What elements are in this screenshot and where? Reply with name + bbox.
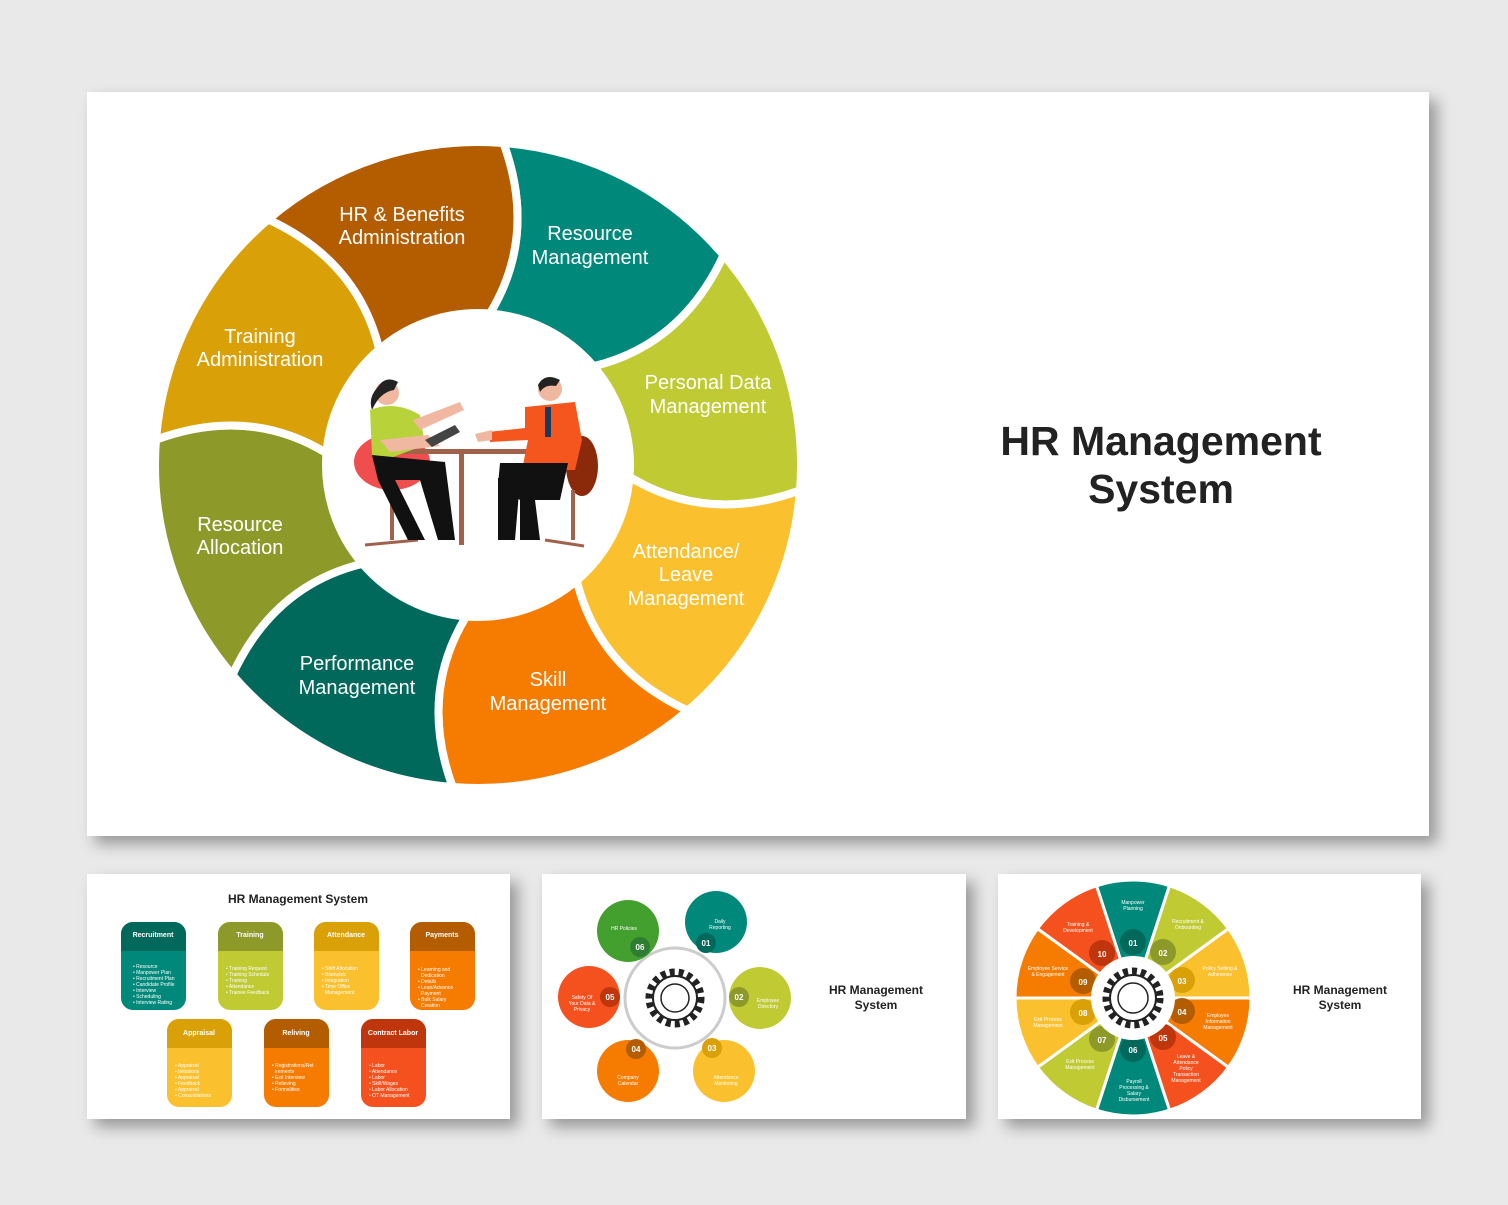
cards: • Recruitment Plan [133,976,175,982]
thumbnail title [829,983,923,1012]
segment labels: Policy [1179,1066,1193,1072]
segment labels: Adherence [1208,972,1232,978]
segment: performance management: Performance [300,653,414,675]
cards: • Interview Rating [133,1000,172,1006]
segment labels: Training & [1067,922,1090,928]
thumbnail title: System [855,998,897,1012]
cards: irements [275,1069,295,1075]
segment: resource management: Management [532,247,649,269]
cards: Management [325,990,355,996]
segment: resource management: Resource [547,223,633,245]
cards: • Trainee Feedback [226,990,270,996]
segment labels: Management [1033,1023,1063,1029]
number badges: 08 [1079,1009,1088,1018]
circles: 03 [708,1044,717,1053]
thumbnail title: HR Management [829,983,923,997]
circles: Monitoring [714,1081,738,1087]
circles: Employee [757,998,779,1004]
pie wheel [1015,880,1251,1116]
circles: Privacy [574,1007,591,1013]
thumbnail: card layout [87,874,510,1119]
cards: • Exit Interview [272,1075,305,1081]
segment: training administration: Training [224,326,296,348]
cards: • Appraisal [175,1087,199,1093]
central gear [625,948,725,1048]
segment labels: Payroll [1126,1079,1142,1085]
segment labels: Salary [1127,1091,1142,1097]
circles: Company [617,1075,639,1081]
number badges: 05 [1159,1034,1168,1043]
number badges: 04 [1178,1008,1187,1017]
cards: • Attendance [226,984,254,990]
cards: • Resource [133,964,158,970]
cards: • Attendance [369,1069,397,1075]
number badges: 10 [1098,950,1107,959]
cards: • OT Management [369,1093,410,1099]
cards: • Labor [369,1075,385,1081]
thumbnail title: HR Management [1293,983,1387,997]
segment labels: Transaction [1173,1072,1199,1078]
circles: Daily [714,919,726,925]
segment labels: Exit Process [1066,1059,1094,1065]
circles: 04 [632,1045,641,1054]
cards: • Lean/Advance [418,985,453,991]
thumbnail: circles layout [542,874,966,1119]
cards: • Bulk Salary [418,997,447,1003]
circles: Calendar [618,1081,638,1087]
cards: Payment [421,991,441,997]
segment labels: Policy Setting & [1202,966,1238,972]
segment labels: Attendance [1173,1060,1199,1066]
segment labels: Employee [1207,1013,1229,1019]
cards: • Appraisal [175,1075,199,1081]
circles: Directory [758,1004,778,1010]
segment labels: Management [1171,1078,1201,1084]
circles: Reporting [709,925,731,931]
cards [121,922,475,1107]
segment: training administration: Administration [197,349,323,371]
circles [558,891,791,1102]
segment: performance management: Management [299,677,416,699]
circles: Safety Of [572,995,593,1001]
cards: Attendance [327,932,365,939]
cards: • Manpower Plan [133,970,171,976]
cards: Creation [421,1003,440,1009]
cards: • Training Request [226,966,268,972]
segment labels: Development [1063,928,1093,934]
segment: hr & benefits administration [268,142,518,349]
circles: 02 [735,993,744,1002]
segment: hr & benefits administration: Administration [339,227,465,249]
cards: • Time Office [322,984,351,990]
segment labels: Employee Service [1028,966,1068,972]
main slide [87,92,1429,836]
segment labels: Manpower [1121,900,1145,906]
segment labels: Disbursement [1119,1097,1150,1103]
cards: Payments [425,932,459,939]
segment labels [1028,900,1238,1103]
cards: • Biometric [322,972,346,978]
segment: performance management [232,564,466,787]
cards: • Learning and [418,967,451,973]
cards: • Skill/Wages [369,1081,399,1087]
segment: personal data management: Management [650,396,767,418]
segment: resource allocation: Allocation [197,537,283,559]
segment: attendance/leave management: Management [628,588,745,610]
cards: • Details [418,979,437,985]
cards: • Training Schedule [226,972,269,978]
cards: Reliving [282,1030,310,1037]
circles: Attendance [713,1075,739,1081]
ring diagram [155,142,801,788]
segment labels: Planning [1123,906,1143,912]
number badges: 01 [1129,939,1138,948]
cards: • Shift Allocation [322,966,358,972]
cards: Appraisal [183,1030,215,1037]
cards: Dedication [421,973,445,979]
thumbnail title: HR Management System [228,892,368,906]
circles: 01 [702,939,711,948]
segment: personal data management: Personal Data [645,372,772,394]
segment: skill management [438,581,688,788]
circles: HR Policies [611,926,637,932]
segment: personal data management [594,255,801,505]
segment labels: & Engagement [1031,972,1065,978]
cards: • Labor [369,1063,385,1069]
segment: skill management: Skill [530,669,566,691]
cards: • Training [226,978,247,984]
number badges: 03 [1178,977,1187,986]
cards: • Integration [322,978,349,984]
number badges: 09 [1079,978,1088,987]
cards: • Initiations [175,1069,200,1075]
segment: resource allocation [155,425,362,675]
segment labels: Leave & [1177,1054,1196,1060]
cards: • Formalities [272,1087,300,1093]
circles: Your Data & [569,1001,596,1007]
number badges: 02 [1159,949,1168,958]
cards: Recruitment [133,932,174,939]
number badges [1070,929,1195,1062]
segment labels: Processing & [1119,1085,1149,1091]
segment: resource management [490,143,724,366]
title: System [1088,466,1234,512]
segment labels: Management [1203,1025,1233,1031]
cards: • Appraisal [175,1063,199,1069]
segment labels: Information [1205,1019,1231,1025]
segment labels: Exit Process [1034,1017,1062,1023]
cards: Contract Labor [368,1030,418,1037]
segment: resource allocation: Resource [197,514,283,536]
cards: • Feedback [175,1081,201,1087]
segment: skill management: Management [490,693,607,715]
title: HR Management [1000,418,1322,464]
number badges: 06 [1129,1046,1138,1055]
circles: 06 [636,943,645,952]
segment labels: Management [1065,1065,1095,1071]
cards: • Interview [133,988,157,994]
cards: • Labor Allocation [369,1087,408,1093]
segment: attendance/leave management: Leave [659,564,713,586]
segment: attendance/leave management: Attendance/ [633,541,740,563]
cards: • Relieving [272,1081,296,1087]
illustration: two people at table [354,377,598,546]
segment: hr & benefits administration: HR & Benefits [339,204,465,226]
cards: • Scheduling [133,994,161,1000]
segment labels: Recruitment & [1172,919,1204,925]
segment: attendance/leave management [577,477,800,711]
cards: • Candidate Profile [133,982,175,988]
number badges: 07 [1098,1036,1107,1045]
cards: • Consolidations [175,1093,211,1099]
thumbnail title [1293,983,1387,1012]
segment: training administration [156,219,379,453]
title [1000,418,1322,512]
cards: • Registrations/Ret [272,1063,314,1069]
circles: 05 [606,993,615,1002]
cards: Training [236,932,264,939]
thumbnail title: System [1319,998,1361,1012]
thumbnail: pie layout [998,874,1421,1119]
segment labels: Onboarding [1175,925,1201,931]
center gear [1091,956,1175,1040]
